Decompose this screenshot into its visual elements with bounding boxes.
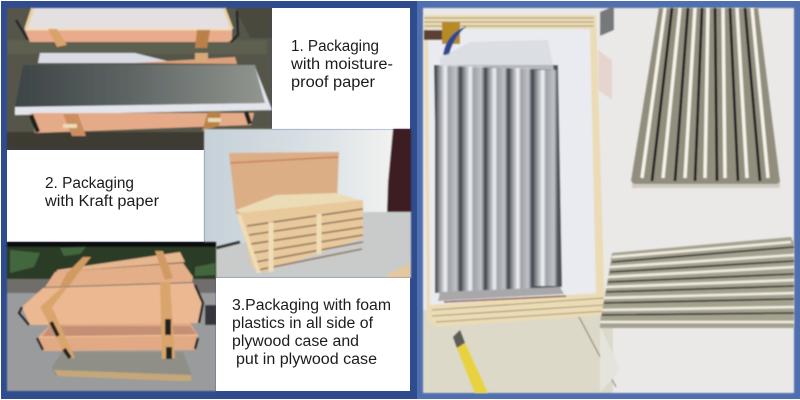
panel: left packaging steps	[1, 1, 417, 399]
panel: left packaging steps: 2. Packaging	[45, 175, 134, 192]
panel: left packaging steps: with moisture-	[290, 56, 393, 73]
photo: horizontal row of rods	[600, 237, 794, 328]
panel: left packaging steps: plastics in all side of	[232, 315, 374, 332]
photo: background surface	[423, 6, 794, 393]
icon: yellow utility knife	[453, 330, 488, 393]
photo: rods in foam-lined case	[424, 15, 606, 327]
photo: Kraft paper packaging	[204, 129, 411, 278]
text block: step 1	[272, 8, 410, 129]
panel: right product photo	[417, 1, 800, 399]
panel: left packaging steps: plywood case and	[232, 333, 359, 350]
panel: left packaging steps: 3.Packaging with foam	[232, 297, 391, 314]
text block: step 2	[7, 150, 204, 242]
photo: moisture-proof paper packaging	[7, 8, 272, 150]
photo: plywood cases on pallet	[7, 242, 216, 391]
text block: step 3	[216, 278, 410, 391]
panel: left packaging steps: with Kraft paper	[44, 193, 159, 210]
panel: left packaging steps: put in plywood case	[236, 351, 377, 368]
photo: upright fan of rods	[631, 8, 780, 188]
panel: left packaging steps: proof paper	[291, 74, 375, 91]
panel: left packaging steps: 1. Packaging	[291, 38, 379, 55]
